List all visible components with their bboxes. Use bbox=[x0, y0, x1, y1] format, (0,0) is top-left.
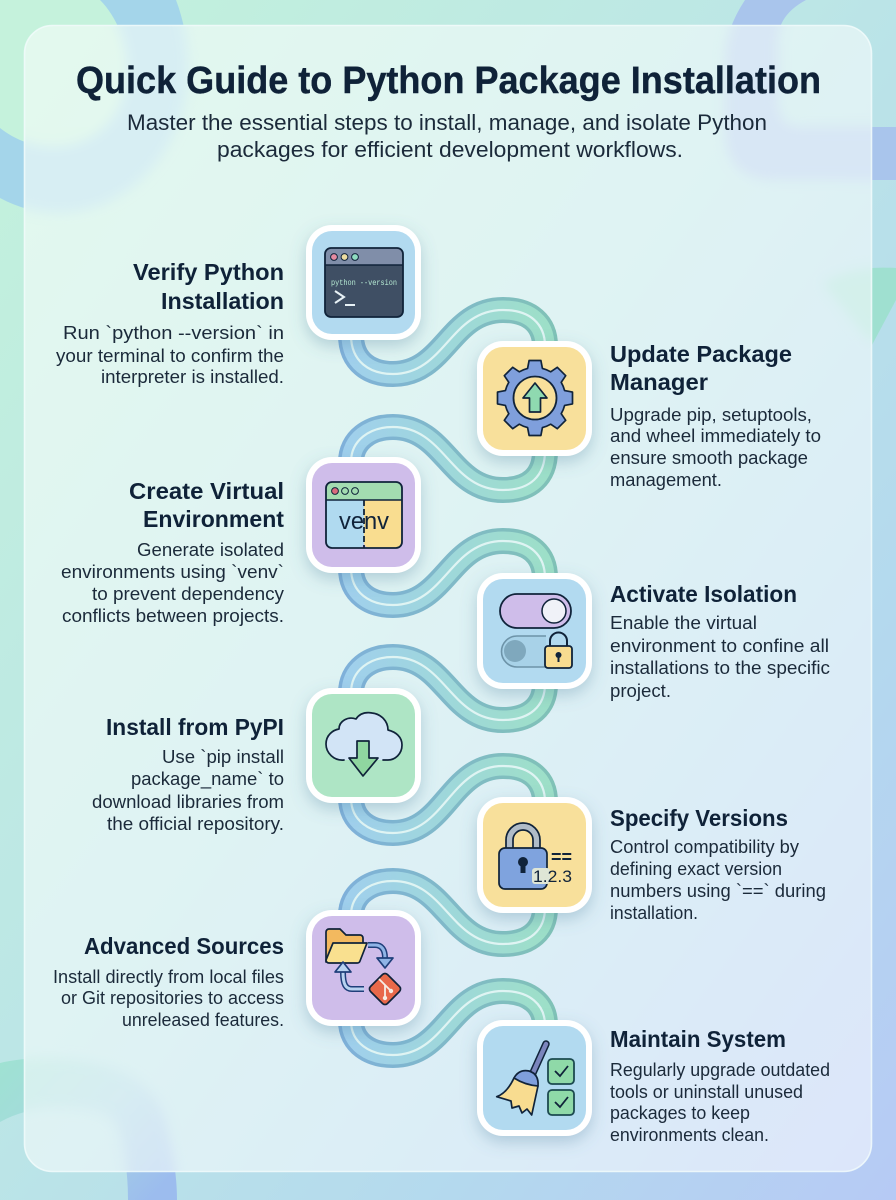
body: step 3: environments using `venv` bbox=[61, 562, 284, 582]
body: step 7: Install directly from local files bbox=[53, 967, 284, 987]
body: step 8: Regularly upgrade outdated bbox=[610, 1060, 830, 1080]
step 8 text bbox=[610, 1026, 830, 1145]
body: step 1: Run `python --version` in bbox=[63, 323, 284, 343]
icon: broom and checklist bbox=[497, 1044, 574, 1115]
body: step 2: and wheel immediately to bbox=[610, 426, 821, 446]
connector: step 7 to step 8 bbox=[351, 991, 545, 1055]
connector: step 2 to step 3 bbox=[351, 427, 545, 490]
body: step 5 bbox=[92, 747, 284, 834]
body: step 5: package_name` to bbox=[131, 769, 284, 790]
title: Quick Guide to Python Package Installation bbox=[76, 60, 821, 102]
icon: padlock with version bbox=[499, 823, 572, 889]
body: step 5: Use `pip install bbox=[162, 747, 284, 767]
icon: split window venv: venv bbox=[339, 508, 389, 535]
heading: verify python installation: Installation bbox=[161, 288, 284, 314]
body: step 8: tools or uninstall unused bbox=[610, 1082, 803, 1102]
icon: terminal window: python --version bbox=[331, 278, 397, 288]
body: step 2 bbox=[610, 405, 821, 490]
heading: install from pypi: Install from PyPI bbox=[106, 714, 284, 740]
step 6 text bbox=[610, 805, 826, 923]
body: step 6: installation. bbox=[610, 903, 698, 923]
heading: update package manager bbox=[610, 341, 792, 395]
tile: step 7 sources bbox=[306, 910, 421, 1026]
icon: toggles and padlock bbox=[500, 594, 572, 668]
heading: update package manager: Update Package bbox=[610, 341, 792, 367]
body: step 8: packages to keep bbox=[610, 1103, 750, 1123]
tile: step 1 terminal bbox=[306, 225, 421, 340]
body: step 6: Control compatibility by bbox=[610, 837, 799, 857]
icon: cloud download bbox=[326, 713, 402, 776]
heading: create virtual environment: Create Virtual bbox=[129, 478, 284, 504]
body: step 2: management. bbox=[610, 470, 722, 490]
body: step 6 bbox=[610, 837, 826, 923]
heading: activate isolation: Activate Isolation bbox=[610, 581, 797, 607]
body: step 6: defining exact version bbox=[610, 859, 782, 879]
step 4 text bbox=[610, 581, 830, 701]
body: step 3: Generate isolated bbox=[137, 540, 284, 560]
step 1 text bbox=[56, 259, 284, 387]
icon: padlock with version: 1.2.3 bbox=[533, 867, 572, 886]
step 2 text bbox=[610, 341, 821, 490]
body: step 8: environments clean. bbox=[610, 1125, 769, 1145]
tile: step 8 broom bbox=[477, 1020, 592, 1136]
body: step 7: or Git repositories to access bbox=[61, 988, 284, 1008]
body: step 1 bbox=[56, 323, 284, 387]
body: step 6: numbers using `==` during bbox=[610, 881, 826, 901]
body: step 2: ensure smooth package bbox=[610, 448, 808, 468]
body: step 8 bbox=[610, 1060, 830, 1145]
subtitle: Master the essential steps to install, manage, and isolate Python bbox=[127, 110, 767, 135]
body: step 3: conflicts between projects. bbox=[62, 606, 284, 626]
body: step 7 bbox=[53, 967, 284, 1030]
subtitle: packages for efficient development workflows. bbox=[217, 137, 683, 162]
body: step 7: unreleased features. bbox=[122, 1010, 284, 1030]
body: step 3 bbox=[61, 540, 284, 626]
connector: step 5 to step 6 bbox=[351, 766, 545, 833]
connector: step 6 to step 7 bbox=[351, 881, 545, 944]
step 3 text bbox=[61, 478, 284, 626]
body: step 4: installations to the specific bbox=[610, 658, 830, 678]
tile: step 5 cloud bbox=[306, 688, 421, 803]
connector: step 1 to step 2 bbox=[351, 310, 545, 374]
body: step 5: download libraries from bbox=[92, 792, 284, 812]
heading: create virtual environment bbox=[129, 478, 284, 532]
body: step 1: your terminal to confirm the bbox=[56, 346, 284, 366]
connector: step 3 to step 4 bbox=[351, 541, 545, 605]
tile: step 4 toggles bbox=[477, 573, 592, 689]
heading: specify versions: Specify Versions bbox=[610, 805, 788, 831]
icon: padlock with version: == bbox=[551, 847, 572, 867]
body: step 4: Enable the virtual bbox=[610, 613, 757, 633]
icon: gear with up arrow bbox=[498, 360, 572, 436]
body: step 4 bbox=[610, 613, 830, 701]
body: step 4: project. bbox=[610, 681, 671, 701]
subtitle bbox=[127, 110, 767, 162]
body: step 1: interpreter is installed. bbox=[101, 367, 284, 387]
tile: step 2 gear bbox=[477, 341, 592, 456]
connector: step 4 to step 5 bbox=[351, 657, 545, 720]
step 7 text bbox=[53, 933, 284, 1030]
heading: maintain system: Maintain System bbox=[610, 1026, 786, 1052]
body: step 3: to prevent dependency bbox=[92, 584, 284, 604]
heading: advanced sources: Advanced Sources bbox=[84, 933, 284, 959]
icon: folder and git arrows bbox=[326, 929, 402, 1006]
tile: step 3 venv bbox=[306, 457, 421, 573]
body: step 2: Upgrade pip, setuptools, bbox=[610, 405, 812, 425]
tile: step 6 padlock bbox=[477, 797, 592, 913]
body: step 5: the official repository. bbox=[107, 814, 284, 834]
heading: verify python installation bbox=[133, 259, 284, 314]
heading: create virtual environment: Environment bbox=[143, 506, 284, 532]
body: step 4: environment to confine all bbox=[610, 636, 829, 656]
heading: update package manager: Manager bbox=[610, 369, 708, 395]
step 5 text bbox=[92, 714, 284, 834]
heading: verify python installation: Verify Python bbox=[133, 259, 284, 285]
